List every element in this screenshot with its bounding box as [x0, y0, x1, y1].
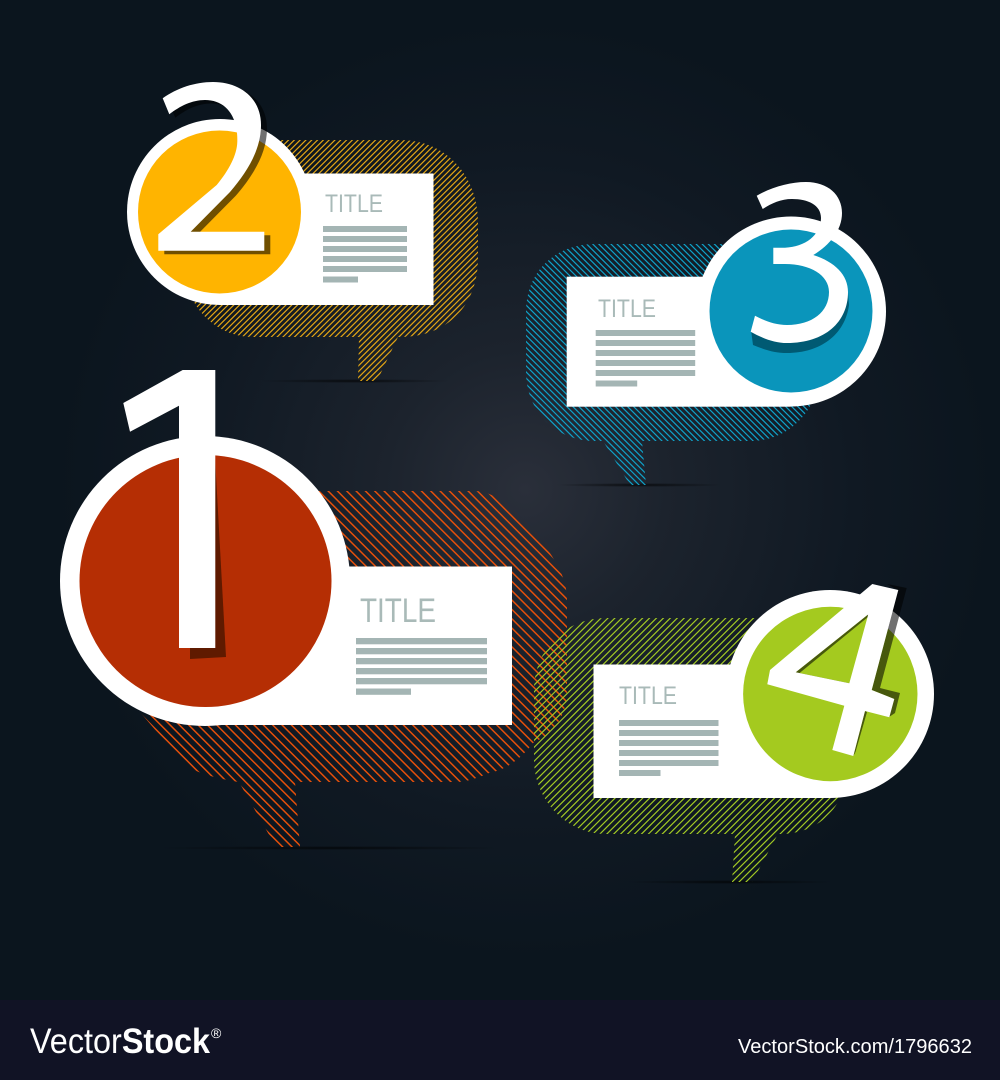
- step 1 card: [60, 370, 512, 726]
- step 2 card: [127, 82, 434, 305]
- number 2: [158, 82, 264, 251]
- footer bar: [0, 1000, 1000, 1080]
- step 1 speech bubble hatch: [141, 491, 567, 847]
- red circle: [80, 455, 332, 707]
- step 3 speech bubble hatch: [526, 244, 810, 485]
- title: TITLE: [360, 592, 436, 630]
- footer image id: VectorStock.com/1796632: [738, 1036, 972, 1058]
- registered mark: ®: [211, 1025, 222, 1041]
- white card and ring: [594, 590, 934, 798]
- text placeholder lines: [356, 638, 487, 695]
- yellow circle: [138, 130, 301, 294]
- text placeholder lines: [619, 720, 718, 776]
- white card and ring: [567, 216, 886, 407]
- number 1: [123, 370, 215, 648]
- number 1 shadow: [190, 450, 226, 659]
- footer logo: VectorStock: [30, 1022, 210, 1061]
- number 4 shadow: [796, 584, 907, 756]
- text placeholder lines: [323, 226, 407, 282]
- green circle: [743, 607, 918, 781]
- white card and ring: [127, 119, 434, 305]
- title: TITLE: [619, 682, 677, 710]
- number 4: [767, 584, 898, 756]
- step 4 card: [594, 584, 934, 798]
- number 3: [751, 182, 848, 343]
- title: TITLE: [325, 190, 383, 218]
- number 3 shadow: [751, 292, 849, 353]
- step 2 speech bubble hatch: [194, 140, 478, 381]
- text placeholder lines: [596, 330, 695, 386]
- step 3 card: [567, 182, 886, 407]
- step 4 speech bubble hatch: [534, 618, 838, 882]
- white card and ring: [60, 436, 512, 726]
- tail ground shadows: [155, 379, 835, 884]
- number 2 shadow: [164, 86, 270, 254]
- title: TITLE: [598, 295, 656, 323]
- blue circle: [710, 230, 872, 392]
